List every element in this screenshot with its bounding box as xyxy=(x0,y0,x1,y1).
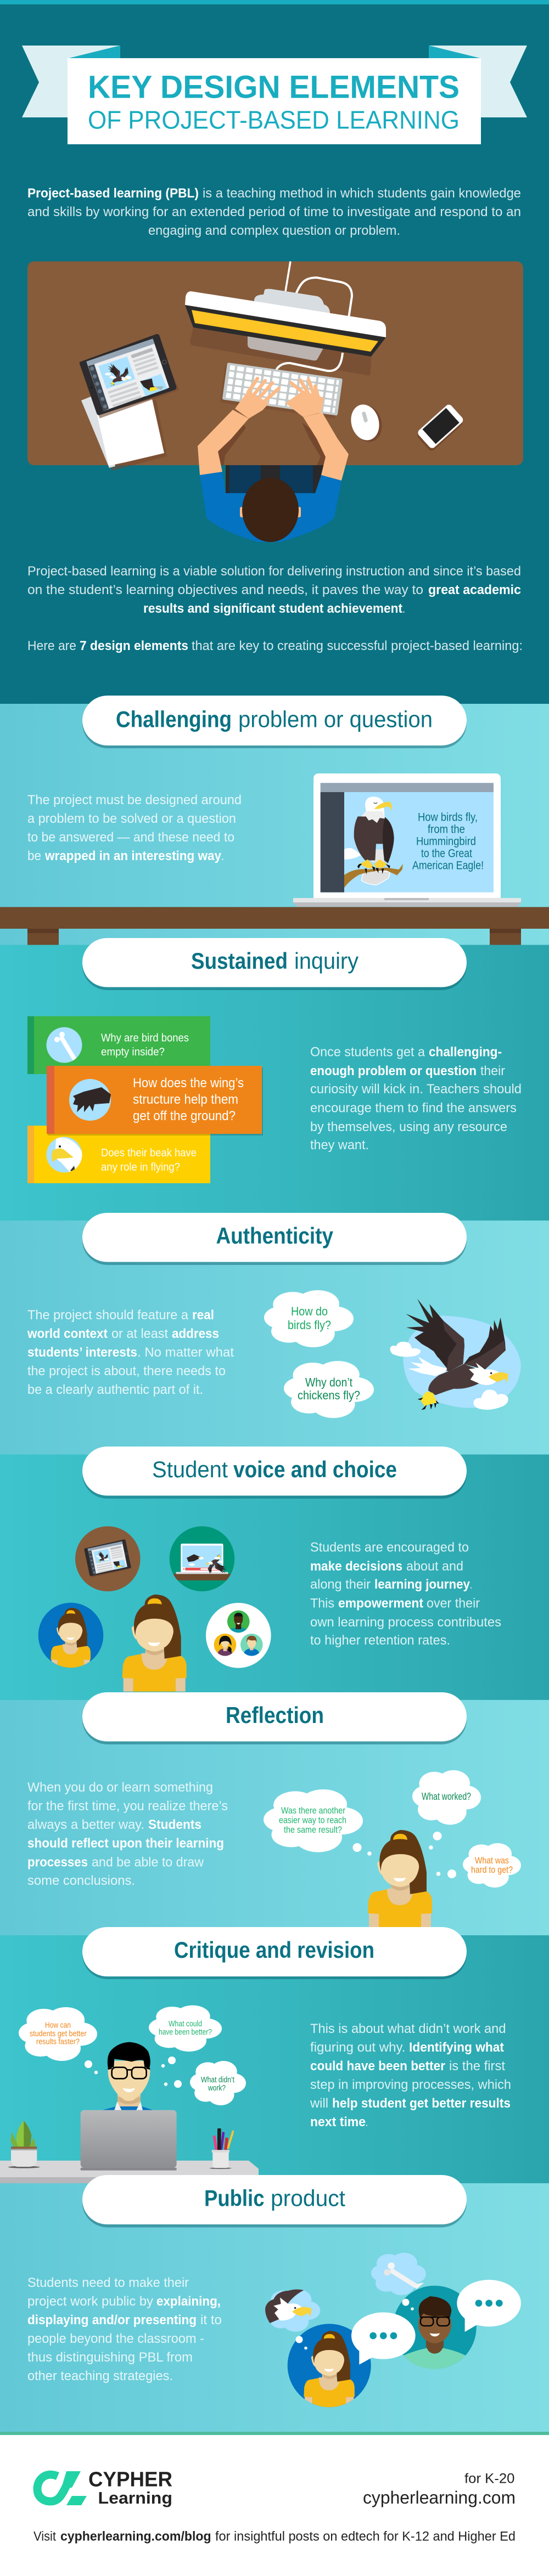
body text: should reflect upon their learning xyxy=(27,1836,224,1851)
thought bubble: what worked: What worked? xyxy=(422,1791,471,1802)
body text xyxy=(27,1308,234,1397)
intro paragraph: Project-based learning (PBL) xyxy=(27,186,199,201)
card: yellow question: any role in flying? xyxy=(101,1161,180,1173)
intro paragraph: engaging and complex question or problem. xyxy=(148,223,400,238)
title: KEY DESIGN ELEMENTS xyxy=(88,69,460,105)
paragraph: 7 design elements: that are key to creating successful project-based learning: xyxy=(192,639,523,653)
keyboard xyxy=(220,362,343,419)
body text: . No matter what xyxy=(137,1345,234,1360)
body text: for the first time, you realize there’s xyxy=(27,1799,228,1814)
blog link line xyxy=(33,2529,516,2544)
thought bubble: what didn't work: work? xyxy=(208,2083,226,2093)
body text: world context xyxy=(27,1326,108,1341)
body text: their xyxy=(480,1064,505,1078)
body text: own learning process contributes xyxy=(310,1615,501,1630)
body text: encourage them to find the answers xyxy=(310,1100,517,1116)
card: orange question: How does the wing’s xyxy=(133,1076,244,1091)
body text: be a clearly authentic part of it. xyxy=(27,1382,203,1397)
thought bubble: what didn't work xyxy=(190,2061,246,2105)
thought bubble: how can students xyxy=(19,2007,97,2061)
body text: next time xyxy=(310,2115,366,2129)
body text: students’ interests xyxy=(27,1345,137,1360)
thought bubble: how can students: students get better xyxy=(30,2029,87,2038)
paragraph: viable solution: results and significant student achievement xyxy=(143,601,402,616)
thought cloud: eagle xyxy=(265,2289,320,2332)
body text: The project must be designed around xyxy=(27,793,242,807)
heading pill xyxy=(82,1692,467,1744)
body text: to be answered — and these need to xyxy=(27,830,234,845)
body text: make decisions xyxy=(310,1559,402,1574)
thought bubble: what was hard xyxy=(463,1843,521,1888)
desk xyxy=(27,261,523,465)
thought bubble: how do birds fly: How do xyxy=(291,1304,328,1318)
paragraph: 7 design elements xyxy=(27,639,523,653)
body text: people beyond the classroom - xyxy=(27,2331,204,2346)
logo: Learning xyxy=(98,2488,172,2507)
body text: they want. xyxy=(310,1138,369,1153)
body text: wrapped in an interesting way xyxy=(44,849,222,863)
card: yellow question: Does their beak have xyxy=(101,1147,197,1159)
heading pill: product xyxy=(271,2185,345,2211)
thought bubble: why don't chickens fly: Why don’t xyxy=(305,1376,352,1389)
thought bubble: how can students: results faster? xyxy=(36,2037,80,2046)
panel: challenging problem or question xyxy=(0,696,549,945)
thought bubble: what was hard: hard to get? xyxy=(471,1865,513,1875)
body text: address xyxy=(172,1326,219,1341)
illustration: boy with glasses xyxy=(393,2286,477,2369)
body text: Identifying what xyxy=(409,2040,504,2055)
body text: along their xyxy=(310,1577,371,1592)
body text: enough problem or question xyxy=(310,1064,477,1078)
body text: Students xyxy=(148,1817,201,1832)
body text: to higher retention rates. xyxy=(310,1633,450,1648)
body text: empowerment xyxy=(338,1596,423,1611)
paragraph: viable solution: great academic xyxy=(428,583,521,597)
paragraph: viable solution: Project-based learning is a viable solution for delivering instruction and since it’s based xyxy=(27,564,521,579)
card: orange question: structure help them xyxy=(133,1092,238,1107)
body text: . xyxy=(470,1577,472,1592)
arms and hands xyxy=(198,379,349,481)
intro paragraph: and skills by working for an extended period of time to investigate and respond to an xyxy=(27,205,521,219)
body text: Once students get a xyxy=(310,1044,425,1060)
body text: Students are encouraged to xyxy=(310,1540,469,1555)
person body below desk xyxy=(200,465,341,542)
body text: it to xyxy=(200,2313,222,2328)
laptop screen text: to the Great xyxy=(421,847,472,860)
thought dots xyxy=(352,1832,456,1878)
thought bubble: why don't chickens fly xyxy=(284,1361,374,1418)
body text: always xyxy=(27,1817,67,1832)
body text: be xyxy=(27,849,41,863)
card: yellow question xyxy=(27,1126,210,1183)
illustration: man with laptop xyxy=(81,2042,177,2171)
thought bubble: what didn't work: What didn’t xyxy=(201,2075,235,2084)
blog link line: cypherlearning.com/blog xyxy=(60,2529,211,2544)
icon: wing xyxy=(73,1087,111,1112)
body text xyxy=(27,1780,228,1888)
body text xyxy=(310,1540,501,1648)
panel: authenticity xyxy=(0,1213,549,1455)
laptop screen text: Hummingbird xyxy=(416,835,476,848)
body text: explaining, xyxy=(156,2294,221,2309)
body text: The project should feature a xyxy=(27,1308,189,1323)
heading pill: Challenging xyxy=(116,707,232,732)
circle: girl on blue xyxy=(38,1603,103,1668)
body text: over their xyxy=(427,1596,480,1611)
card: green question xyxy=(27,1016,210,1074)
panel: student voice and choice xyxy=(0,1447,549,1700)
illustration: girl on blue circle xyxy=(288,2324,371,2408)
illustration: student at desk seen from above xyxy=(27,261,523,542)
laptop with eagle lesson xyxy=(293,773,521,907)
laptop screen text xyxy=(412,811,484,872)
body text: the project is about, there needs to xyxy=(27,1364,226,1379)
intro paragraph xyxy=(27,186,521,238)
thought bubble: another easier way: easier way to reach xyxy=(279,1815,346,1826)
thought bubble: another easier way: Was there another xyxy=(281,1805,345,1816)
illustration: student girl xyxy=(122,1595,187,1692)
body text xyxy=(310,2021,511,2129)
circle: three student avatars xyxy=(206,1603,271,1668)
heading pill: Reflection xyxy=(226,1702,324,1728)
monitor xyxy=(185,261,386,375)
thought bubble: how do birds fly: birds fly? xyxy=(288,1318,331,1332)
body text: This is about what didn’t work and xyxy=(310,2021,506,2036)
heading pill: problem or question xyxy=(238,707,433,732)
tablet xyxy=(80,334,180,419)
illustration: pencil cup xyxy=(210,2128,234,2169)
heading pill xyxy=(82,1213,467,1265)
body text: processes xyxy=(27,1855,88,1869)
thought dots xyxy=(295,2298,414,2349)
icon: perched eagle xyxy=(344,796,403,888)
body text: learning journey xyxy=(374,1577,470,1592)
body text: by themselves, using any resource xyxy=(310,1120,507,1134)
body text: a problem to be solved or a question xyxy=(27,811,236,826)
thought bubble: what could be better xyxy=(149,2006,222,2052)
intro paragraph: is a teaching method in which students gain knowledge xyxy=(203,186,521,201)
logo: CYPHER xyxy=(88,2468,172,2492)
body text: help student get better results xyxy=(332,2096,511,2111)
heading pill: Critique and revision xyxy=(174,1937,374,1963)
contact xyxy=(363,2471,516,2507)
illustration: flying eagle xyxy=(390,1298,521,1410)
laptop screen text: American Eagle! xyxy=(412,859,484,872)
illustration: plant xyxy=(8,2121,40,2168)
body text: real xyxy=(192,1308,214,1323)
heading pill xyxy=(82,696,467,748)
body text: This xyxy=(310,1596,334,1611)
body text: When you do or learn something xyxy=(27,1780,213,1795)
body text: or at least xyxy=(111,1326,168,1341)
laptop screen text: from the xyxy=(428,823,465,836)
title xyxy=(88,69,460,134)
heading pill: Student xyxy=(152,1456,228,1482)
panel: public product xyxy=(0,2175,549,2432)
body text: Students need to make their xyxy=(27,2275,189,2290)
paragraph: viable solution: . xyxy=(402,601,405,616)
laptop screen text: How birds fly, xyxy=(418,811,478,824)
logo xyxy=(37,2468,172,2507)
illustration: reflecting girl xyxy=(368,1830,432,1927)
speech bubble: boy xyxy=(457,2280,521,2332)
title ribbon xyxy=(22,46,527,144)
body text: could have been better xyxy=(310,2059,445,2074)
thought bubble: what worked xyxy=(412,1770,481,1824)
desk xyxy=(0,2161,259,2183)
body text: a better way. xyxy=(71,1817,144,1832)
paragraph: viable solution: on the student’s learning objectives and needs, it paves the way to xyxy=(27,583,423,597)
heading pill xyxy=(82,1927,467,1979)
thought bubble: another easier way xyxy=(264,1789,363,1852)
body text: challenging- xyxy=(429,1044,502,1060)
paper stack xyxy=(81,392,167,471)
body text xyxy=(27,2275,222,2383)
circle: tablet xyxy=(75,1526,141,1591)
body text: step in improving processes, which xyxy=(310,2077,511,2092)
speech bubble: girl xyxy=(351,2312,416,2365)
body text: some conclusions. xyxy=(27,1873,135,1888)
body text: displaying and/or presenting xyxy=(27,2313,197,2328)
panel: header background xyxy=(0,0,549,704)
icon: logo mark xyxy=(37,2471,87,2505)
card: orange question xyxy=(47,1066,263,1136)
thought bubble: what was hard: What was xyxy=(475,1855,509,1866)
body text: other teaching strategies. xyxy=(27,2369,173,2383)
body text: . xyxy=(221,849,224,863)
heading pill: inquiry xyxy=(294,948,358,974)
thought bubble: another easier way: the same result? xyxy=(284,1824,342,1835)
heading pill: Public xyxy=(204,2185,265,2211)
heading pill: Authenticity xyxy=(216,1223,334,1249)
body text xyxy=(27,793,242,863)
body text: . xyxy=(366,2115,368,2129)
thought cloud: bone xyxy=(371,2253,426,2295)
table xyxy=(0,907,549,945)
card: orange question: get off the ground? xyxy=(133,1109,236,1123)
heading pill: voice and choice xyxy=(233,1456,397,1482)
body text: thus distinguishing PBL from xyxy=(27,2350,193,2365)
panel: critique and revision xyxy=(0,1927,549,2183)
heading pill xyxy=(82,938,467,990)
panel: reflection xyxy=(0,1692,549,1935)
contact: for K-20 xyxy=(464,2471,515,2486)
mouse and phone xyxy=(347,402,466,453)
paragraph: 7 design elements: Here are xyxy=(27,639,76,653)
heading pill xyxy=(82,1447,467,1499)
thought bubble: how do birds fly xyxy=(264,1290,354,1347)
thought bubble: how can students: How can xyxy=(45,2021,71,2030)
body text xyxy=(310,1044,522,1153)
top accent bar xyxy=(0,0,549,4)
footer panel xyxy=(0,2432,549,2576)
circle: video lesson on laptop xyxy=(169,1526,236,1591)
icon: eagle head xyxy=(52,1138,82,1174)
heading pill: Sustained xyxy=(191,948,288,974)
body text: will xyxy=(310,2096,328,2111)
body text: and be able to draw xyxy=(92,1855,204,1869)
blog link line: Visit xyxy=(33,2529,56,2544)
body text: is the first xyxy=(449,2059,505,2074)
card: green question: Why are bird bones xyxy=(101,1032,189,1044)
body text: curiosity will kick in. Teachers should xyxy=(310,1082,522,1097)
body text: about and xyxy=(406,1559,463,1574)
title: OF PROJECT-BASED LEARNING xyxy=(88,105,460,134)
paragraph: 7 design elements: 7 design elements xyxy=(80,639,188,653)
panel: sustained inquiry xyxy=(0,938,549,1221)
thought dots xyxy=(85,2057,182,2088)
heading pill xyxy=(82,2175,467,2227)
body text: project work public by xyxy=(27,2294,153,2309)
blog link line: for insightful posts on edtech for K-12 and Higher Ed xyxy=(215,2529,516,2544)
contact: cypherlearning.com xyxy=(363,2488,516,2507)
thought bubble: what could be better: What could xyxy=(169,2019,202,2029)
body text: figuring out why. xyxy=(310,2040,405,2055)
icon: bone xyxy=(54,1032,77,1063)
paragraph: viable solution xyxy=(27,564,521,616)
thought bubble: why don't chickens fly: chickens fly? xyxy=(298,1388,360,1402)
thought bubble: what could be better: have been better? xyxy=(159,2027,212,2037)
card: green question: empty inside? xyxy=(101,1046,165,1058)
